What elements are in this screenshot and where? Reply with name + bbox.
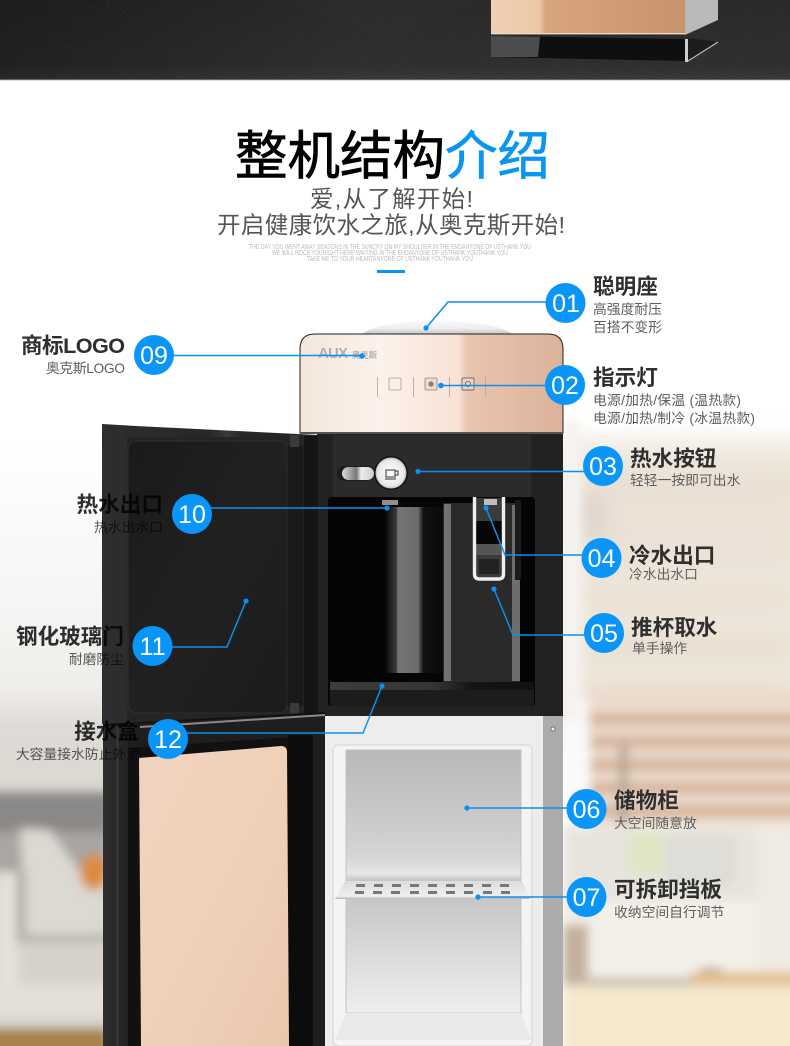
- callout 11 钢化玻璃门: 耐磨防尘: [69, 652, 124, 667]
- water outlet alcove: [328, 497, 535, 706]
- subtitle: 爱,从了解开始!: [310, 186, 473, 212]
- callout 04 冷水出口: 冷水出水口: [629, 567, 698, 582]
- callout 02 指示灯: 02: [551, 372, 579, 400]
- control panel: [333, 435, 531, 497]
- dispenser body: [317, 430, 563, 716]
- brand logo: AUX: [318, 345, 348, 362]
- callout 04 冷水出口: [483, 505, 715, 582]
- callout 09 商标LOGO: 商标LOGO: [21, 333, 125, 358]
- callout 10 热水出口: 10: [178, 501, 206, 529]
- lid: [362, 320, 512, 334]
- product base in band: [491, 0, 718, 62]
- callout 05 推杯取水: [491, 586, 718, 656]
- callout 09 商标LOGO: 09: [140, 342, 168, 370]
- callout 05 推杯取水: 单手操作: [632, 641, 687, 656]
- callout 11 钢化玻璃门: 钢化玻璃门: [16, 624, 124, 649]
- callout 07 可拆卸挡板: 收纳空间自行调节: [614, 905, 725, 920]
- callout 10 热水出口: 热水出口: [77, 492, 163, 517]
- callout 04 冷水出口: 04: [588, 545, 615, 573]
- subtitle: 开启健康饮水之旅,从奥克斯开始!: [217, 212, 565, 238]
- callout 12 接水盒: 12: [154, 726, 182, 754]
- callout 07 可拆卸挡板: 07: [573, 884, 600, 912]
- callout 03 热水按钮: 轻轻一按即可出水: [630, 473, 741, 488]
- white cabinet: [325, 716, 563, 1046]
- english small print: [249, 244, 531, 263]
- callout 11 钢化玻璃门: [16, 598, 249, 667]
- callout 01 聪明座: [423, 274, 662, 335]
- top glass panel: [300, 334, 563, 434]
- blurred room background: right: [563, 420, 790, 1046]
- callout 07 可拆卸挡板: 可拆卸挡板: [614, 877, 722, 902]
- blurred room background: left: [0, 440, 114, 1046]
- callout 06 储物柜: 06: [573, 796, 600, 824]
- open upper door: [102, 424, 318, 726]
- lower door: [103, 712, 325, 1046]
- callout 07 可拆卸挡板: [475, 877, 725, 920]
- title: 整机结构介绍: [235, 127, 550, 186]
- callout 01 聪明座: 聪明座: [593, 274, 658, 299]
- callout 09 商标LOGO: [21, 333, 365, 376]
- blue accent bar: [377, 270, 405, 273]
- callout 02 指示灯: [438, 365, 755, 426]
- callout 05 推杯取水: 推杯取水: [631, 615, 718, 640]
- callout 06 储物柜: 大空间随意放: [614, 815, 697, 831]
- callout 05 推杯取水: 05: [590, 620, 618, 648]
- removable shelf: [335, 881, 530, 899]
- callout 03 热水按钮: [415, 446, 741, 488]
- english small print: WE WILL ROCK YOURIGHT HERE WAITING IN THE ENDANYONE OF USTHANK YOUTHANK YOU: [272, 250, 508, 257]
- callout 01 聪明座: 百搭不变形: [593, 320, 662, 335]
- callout 04 冷水出口: 冷水出口: [629, 543, 715, 568]
- callout 10 热水出口: [77, 492, 390, 535]
- english small print: THE DAY YOU WENT AWAY SEASONS IN THE SUNCRY ON MY SHOULDER IN THE ENDANYONE OF USTHANK YOU: [249, 244, 531, 251]
- callout 12 接水盒: 大容量接水防止外洒: [16, 746, 140, 762]
- callout 01 聪明座: 高强度耐压: [593, 301, 662, 317]
- callout 02 指示灯: 指示灯: [593, 365, 658, 390]
- callout 03 热水按钮: 热水按钮: [630, 446, 716, 471]
- callout 02 指示灯: 电源/加热/制冷 (冰温热款): [593, 411, 755, 426]
- callout 09 商标LOGO: 奥克斯LOGO: [46, 360, 125, 376]
- water dispenser product: [102, 320, 563, 1046]
- callout 11 钢化玻璃门: 11: [140, 633, 165, 661]
- top dark product band: [0, 0, 790, 80]
- callout 10 热水出口: 热水出水口: [94, 520, 163, 535]
- english small print: TAKE ME TO YOUR HEARTANYONE OF USTHANK YOUTHANK YOU: [307, 256, 473, 263]
- callout 06 储物柜: [464, 788, 697, 831]
- callout 12 接水盒: [16, 683, 385, 762]
- callout 03 热水按钮: 03: [589, 453, 617, 481]
- brand logo: [318, 345, 378, 362]
- callout 02 指示灯: 电源/加热/保温 (温热款): [593, 393, 741, 408]
- subtitle: [217, 186, 565, 238]
- brand logo: 奥克斯: [352, 350, 378, 360]
- callout 01 聪明座: 01: [552, 290, 580, 318]
- indicator icons: [378, 377, 486, 397]
- callout 12 接水盒: 接水盒: [74, 719, 139, 744]
- callout 06 储物柜: 储物柜: [614, 788, 679, 813]
